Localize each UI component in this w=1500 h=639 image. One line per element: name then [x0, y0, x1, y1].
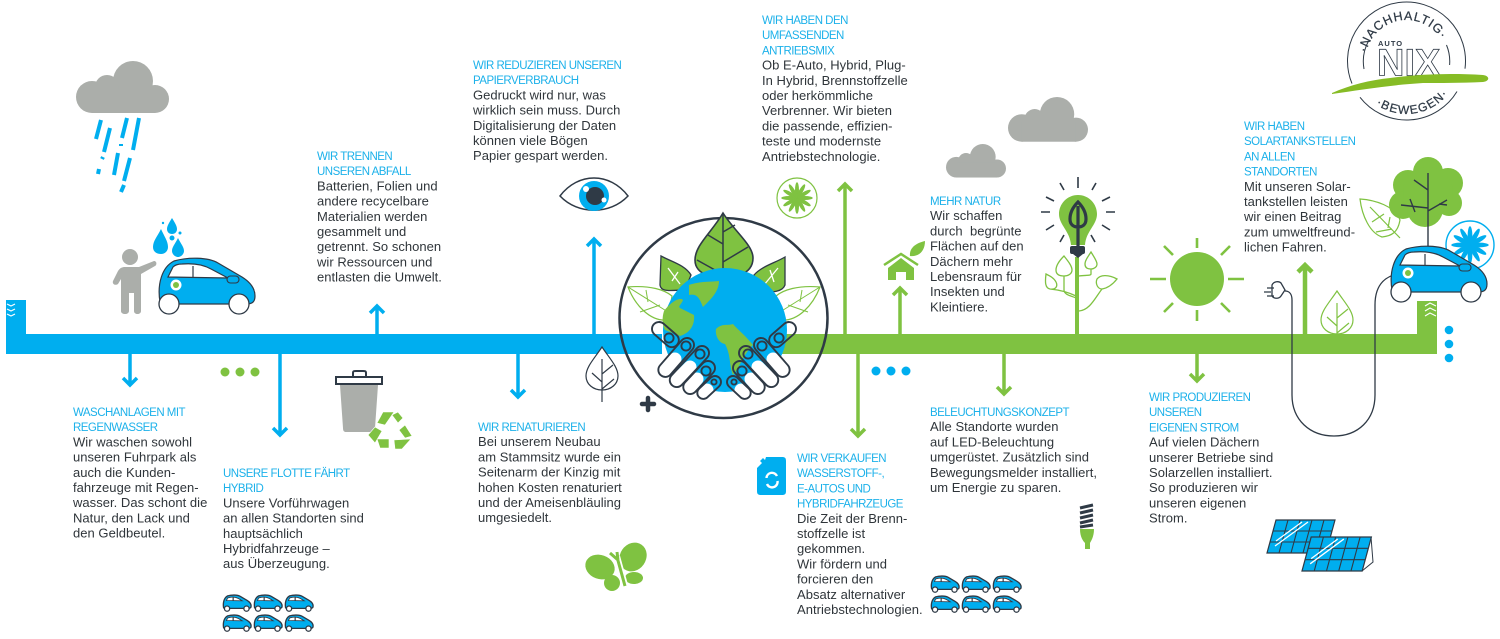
text: Renaturieren: und der Ameisenbläuling	[478, 495, 621, 510]
text: Wasserstoff: Die Zeit der Brenn-	[797, 511, 907, 526]
text: Flotte: aus Überzeugung.	[223, 556, 330, 571]
text: Wasserstoff: HYBRIDFAHRZEUGE	[797, 499, 904, 511]
icon: small cars	[223, 595, 313, 631]
text: Antriebsmix: WIR HABEN DEN	[762, 15, 848, 27]
icon: water drops	[153, 218, 184, 257]
text: Mehr Natur: durch begrünte	[930, 223, 1022, 238]
text: Strom: Strom.	[1149, 511, 1187, 526]
text: Strom: Auf vielen Dächern	[1149, 435, 1259, 450]
text: Antriebsmix: Verbrenner. Wir bieten	[762, 103, 892, 118]
dots vertical	[1445, 326, 1453, 362]
icon: rain cloud	[76, 61, 169, 192]
text: Beleuchtung: auf LED-Beleuchtung	[930, 434, 1054, 449]
icon: canister	[757, 457, 786, 495]
text: Solartankstellen: wir einen Beitrag	[1243, 209, 1341, 224]
text: Wasserstoff: Antriebstechnologien.	[797, 602, 923, 617]
text: Strom: unseren eigenen	[1149, 495, 1246, 510]
text: Abfall: andere recycelbare	[317, 194, 429, 209]
green dots	[220, 368, 260, 376]
text: Wasserstoff: E-AUTOS UND	[797, 483, 871, 495]
text: Solartankstellen: zum umweltfreund-	[1244, 224, 1355, 239]
icon: side leaves	[628, 256, 820, 320]
logo swoosh	[1332, 74, 1488, 94]
text: Antriebsmix: Ob E-Auto, Hybrid, Plug-	[762, 58, 906, 73]
globe illustration with hands	[620, 213, 828, 418]
icon: recycle	[368, 412, 412, 449]
text: Mehr Natur: Lebensraum für	[930, 269, 1022, 284]
text: Solartankstellen: tankstellen leisten	[1244, 194, 1348, 209]
text: Mehr Natur: Wir schaffen	[930, 208, 1002, 223]
text: Renaturieren: Seitenarm der Kinzig mit	[478, 465, 621, 480]
icon: plug and cable	[1264, 273, 1408, 436]
icon: green house	[884, 241, 925, 280]
text: Beleuchtung: um Energie zu sparen.	[930, 480, 1061, 495]
text: Solartankstellen: AN ALLEN	[1244, 151, 1295, 163]
text: Strom: Solarzellen installiert.	[1149, 465, 1273, 480]
arrow	[1298, 265, 1312, 334]
icon: leaf outline big	[1360, 199, 1400, 238]
arrow	[997, 354, 1011, 394]
text: Wasserstoff: gekommen.	[797, 541, 865, 556]
text: Antriebsmix: UMFASSENDEN	[762, 30, 844, 42]
logo top text: ·NACHHALTIG·	[1360, 11, 1444, 51]
icon: light bulb with leaf	[1041, 177, 1117, 334]
text: Papier: können viele Bögen	[473, 133, 588, 148]
text: Renaturieren: hohen Kosten renaturiert	[478, 480, 622, 495]
text: Waschanlagen: WASCHANLAGEN MIT	[73, 407, 186, 419]
arrow	[838, 184, 852, 334]
icon: butterfly	[582, 537, 652, 591]
arrow	[273, 354, 287, 435]
text: Waschanlagen: auch die Kunden-	[73, 465, 175, 480]
text: Solartankstellen: Mit unseren Solar-	[1244, 179, 1351, 194]
icon: green flower	[777, 178, 817, 218]
text: Strom: WIR PRODUZIEREN	[1149, 392, 1251, 404]
text: Flotte: UNSERE FLOTTE FÄHRT	[223, 468, 350, 480]
text: Flotte: Unsere Vorführwagen	[223, 495, 349, 510]
icon: clouds right	[946, 97, 1088, 178]
text: Mehr Natur: Flächen auf den	[930, 239, 1024, 254]
text: Wasserstoff: stoffzelle ist	[797, 526, 865, 541]
icon: sun	[1150, 238, 1244, 321]
text: Wasserstoff: forcieren den	[797, 572, 873, 587]
text: Mehr Natur: MEHR NATUR	[930, 196, 1001, 208]
text: Beleuchtung: Alle Standorte wurden	[930, 419, 1059, 434]
text: Wasserstoff: WASSERSTOFF-,	[797, 468, 884, 480]
text: Mehr Natur: Insekten und	[930, 284, 1005, 299]
text: Strom: EIGENEN STROM	[1149, 422, 1239, 434]
text: Abfall: Batterien, Folien und	[317, 178, 438, 193]
text: Papier: Papier gespart werden.	[473, 148, 608, 163]
icon: car at charger	[1391, 246, 1487, 302]
icon: blue flower	[1446, 221, 1494, 269]
text: Mehr Natur: Kleintiere.	[930, 299, 988, 314]
text: Waschanlagen: Wir waschen sowohl	[73, 434, 192, 449]
icon: eye	[560, 178, 628, 211]
icon: top leaf	[695, 213, 753, 275]
text: Abfall: entlasten die Umwelt.	[317, 270, 442, 285]
main timeline bar	[6, 300, 1437, 354]
text: Abfall: wir Ressourcen und	[316, 254, 432, 269]
logo bottom text: ·BEWEGEN·	[1378, 92, 1445, 114]
text: Antriebsmix: oder herkömmliche	[762, 88, 873, 103]
icon: leaf outline green	[1321, 291, 1353, 334]
text: Beleuchtung: umgerüstet. Zusätzlich sind	[930, 450, 1089, 465]
icon: trash can	[336, 371, 382, 432]
text: Abfall: UNSEREN ABFALL	[317, 166, 412, 178]
text: Flotte: HYBRID	[223, 483, 264, 495]
text: Renaturieren: umgesiedelt.	[478, 510, 552, 525]
continents	[663, 281, 753, 384]
icon: energy-saving bulb	[1080, 505, 1094, 549]
text: Abfall: WIR TRENNEN	[317, 151, 392, 163]
text: Solartankstellen: WIR HABEN	[1244, 121, 1305, 133]
text: Beleuchtung: BELEUCHTUNGSKONZEPT	[930, 407, 1069, 419]
text: Abfall: getrennt. So schonen	[317, 239, 441, 254]
text: Flotte: hauptsächlich	[223, 526, 303, 541]
icon: solar panels	[1267, 520, 1373, 571]
arrow	[123, 354, 137, 385]
text: Strom: So produzieren wir	[1149, 480, 1259, 495]
icon: tree	[1389, 157, 1463, 246]
text: Waschanlagen: REGENWASSER	[73, 422, 158, 434]
text: Strom: UNSEREN	[1149, 407, 1202, 419]
logo auto label: AUTO	[1378, 39, 1403, 48]
text: Wasserstoff: WIR VERKAUFEN	[797, 453, 886, 465]
text: Wasserstoff: Absatz alternativer	[797, 587, 906, 602]
arrow	[370, 306, 384, 334]
arrow	[587, 239, 601, 334]
text: Antriebsmix: teste und modernste	[762, 134, 881, 149]
text: Renaturieren: WIR RENATURIEREN	[478, 422, 585, 434]
text: Wasserstoff: Wir fördern und	[797, 556, 887, 571]
icon: leaf outline	[586, 347, 618, 402]
icon: blue car washed	[159, 258, 255, 314]
text: Papier: wirklich sein muss. Durch	[472, 103, 620, 118]
text: Solartankstellen: STANDORTEN	[1244, 167, 1317, 179]
right hand	[725, 319, 799, 401]
globe	[663, 268, 787, 392]
text: Waschanlagen: den Geldbeutel.	[73, 526, 165, 541]
icon: person	[113, 249, 156, 314]
text: Renaturieren: am Stammsitz wurde ein	[478, 449, 621, 464]
text: Waschanlagen: unseren Fuhrpark als	[73, 450, 197, 465]
left hand	[649, 319, 723, 401]
text: Flotte: Hybridfahrzeuge –	[223, 541, 330, 556]
text: Antriebsmix: In Hybrid, Brennstoffzelle	[762, 73, 908, 88]
logo NIX wordmark: NIX	[1377, 42, 1441, 84]
arrow	[511, 354, 525, 397]
text: Strom: unserer Betriebe sind	[1149, 450, 1273, 465]
text: Solartankstellen: SOLARTANKSTELLEN	[1244, 136, 1356, 148]
text: Mehr Natur: Dächern mehr	[930, 254, 1013, 269]
text: Beleuchtung: Bewegungsmelder installiert,	[930, 465, 1097, 480]
blue dots	[872, 366, 910, 376]
icon: small cars	[931, 576, 1021, 612]
text: Papier: WIR REDUZIEREN UNSEREN	[473, 60, 622, 72]
text: Renaturieren: Bei unserem Neubau	[478, 434, 601, 449]
icon: plus	[642, 398, 654, 410]
arrow	[1190, 354, 1204, 381]
text: Antriebsmix: Antriebstechnologie.	[762, 149, 880, 164]
text: Abfall: gesammelt und	[317, 224, 406, 239]
arrow	[893, 288, 907, 334]
text: Solartankstellen: lichen Fahren.	[1244, 240, 1327, 255]
text: Papier: Gedruckt wird nur, was	[473, 87, 606, 102]
logo	[1332, 2, 1488, 120]
text: Papier: PAPIERVERBRAUCH	[473, 75, 579, 87]
text: Abfall: Materialien werden	[317, 209, 427, 224]
text: Waschanlagen: Natur, den Lack und	[73, 510, 190, 525]
text: Waschanlagen: fahrzeuge mit Regen-	[73, 480, 199, 495]
text: Papier: Digitalisierung der Daten	[473, 118, 616, 133]
arrow	[851, 354, 865, 436]
text: Flotte: an allen Standorten sind	[223, 511, 364, 526]
text: Antriebsmix: ANTRIEBSMIX	[762, 45, 835, 57]
text: Antriebsmix: die passende, effizien-	[762, 118, 893, 133]
text: Waschanlagen: wasser. Das schont die	[72, 495, 207, 510]
